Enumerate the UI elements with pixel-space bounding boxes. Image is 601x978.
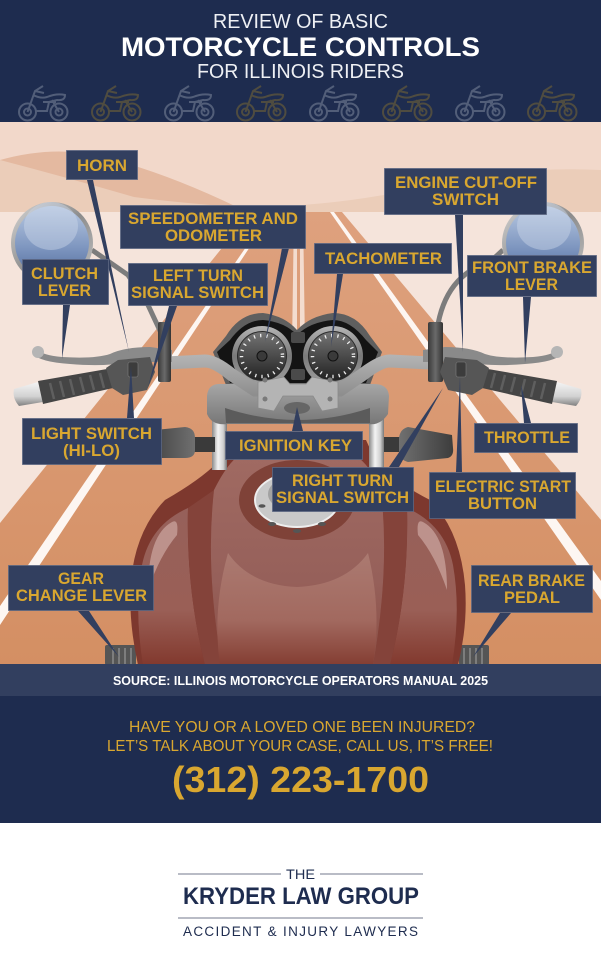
title line 1: REVIEW OF BASIC <box>213 11 388 33</box>
label: gear change lever: CHANGE LEVER <box>16 587 147 605</box>
logo: The Kryder Law Group: KRYDER LAW GROUP <box>183 883 419 910</box>
icon row: motorcycles <box>19 86 576 120</box>
forks <box>212 415 384 470</box>
header panel <box>0 0 601 122</box>
lower clamp <box>207 384 389 424</box>
label: clutch lever: LEVER <box>38 282 91 300</box>
label: light switch <box>22 366 162 464</box>
left controls <box>14 322 172 406</box>
label: rear brake pedal <box>472 566 592 657</box>
label: gear change lever <box>8 566 154 657</box>
lower clamp shading <box>225 408 370 423</box>
title line 3: FOR ILLINOIS RIDERS <box>197 61 404 83</box>
label: rear brake pedal: REAR BRAKE <box>478 572 585 590</box>
label: right turn signal switch <box>272 388 443 512</box>
label: speedometer and odometer: ODOMETER <box>165 227 262 245</box>
label: engine cut-off switch: SWITCH <box>432 191 499 209</box>
call to action text: HAVE YOU OR A LOVED ONE BEEN INJURED? <box>129 719 475 736</box>
label: horn <box>66 150 138 352</box>
footrests <box>105 645 489 665</box>
motorcycle illustration <box>11 202 584 665</box>
right controls <box>423 322 581 406</box>
mirror: right <box>437 202 584 330</box>
label: engine cut-off switch <box>384 168 546 352</box>
top bracket <box>258 377 338 414</box>
source bar <box>0 664 601 696</box>
label: left turn signal switch <box>128 264 268 387</box>
label: front brake lever: FRONT BRAKE <box>472 259 592 277</box>
call to action text <box>107 719 493 755</box>
label: light switch: (HI-LO) <box>63 442 120 460</box>
road surface <box>0 212 601 665</box>
right turn signal <box>384 427 453 462</box>
call to action text: LET’S TALK ABOUT YOUR CASE, CALL US, IT’S FREE! <box>107 738 493 755</box>
label: tachometer: TACHOMETER <box>325 250 442 268</box>
road lines <box>0 212 273 625</box>
road scene background <box>0 122 601 665</box>
handlebar <box>166 361 430 390</box>
label: speedometer and odometer: SPEEDOMETER AND <box>128 210 298 228</box>
label: electric start button: ELECTRIC START <box>435 478 571 496</box>
label: right turn signal switch: RIGHT TURN <box>292 472 393 490</box>
mirror: left <box>11 202 162 335</box>
label: front brake lever <box>468 256 596 363</box>
logo: The Kryder Law Group: THE <box>286 867 315 882</box>
label: ignition key: IGNITION KEY <box>239 437 352 455</box>
label: electric start button: BUTTON <box>468 495 537 513</box>
label: clutch lever: CLUTCH <box>31 265 98 283</box>
label: front brake lever: LEVER <box>505 276 558 294</box>
instrument cluster <box>213 313 382 386</box>
label: clutch lever <box>22 260 108 359</box>
title line 2: MOTORCYCLE CONTROLS <box>121 32 480 62</box>
label: ignition key <box>226 407 362 460</box>
label: throttle <box>474 385 578 452</box>
source bar: SOURCE: ILLINOIS MOTORCYCLE OPERATORS MANUAL 2025 <box>113 674 488 688</box>
phone number: (312) 223-1700 <box>172 759 429 800</box>
logo: The Kryder Law Group: ACCIDENT & INJURY LAWYERS <box>183 924 418 939</box>
logo: The Kryder Law Group <box>178 867 423 939</box>
label: speedometer and odometer <box>120 206 306 342</box>
label: rear brake pedal: PEDAL <box>504 589 560 607</box>
call to action panel <box>0 696 601 823</box>
label: engine cut-off switch: ENGINE CUT-OFF <box>395 174 537 192</box>
label: left turn signal switch: SIGNAL SWITCH <box>131 284 264 302</box>
label: throttle: THROTTLE <box>484 429 570 447</box>
label: tachometer <box>314 244 452 347</box>
fuel tank <box>130 440 466 665</box>
label: gear change lever: GEAR <box>58 570 104 588</box>
label: right turn signal switch: SIGNAL SWITCH <box>276 489 409 507</box>
label: light switch: LIGHT SWITCH <box>31 425 152 443</box>
label: electric start button <box>430 376 576 518</box>
left turn signal <box>145 427 215 458</box>
label: horn: HORN <box>77 157 127 175</box>
label: left turn signal switch: LEFT TURN <box>153 267 243 285</box>
